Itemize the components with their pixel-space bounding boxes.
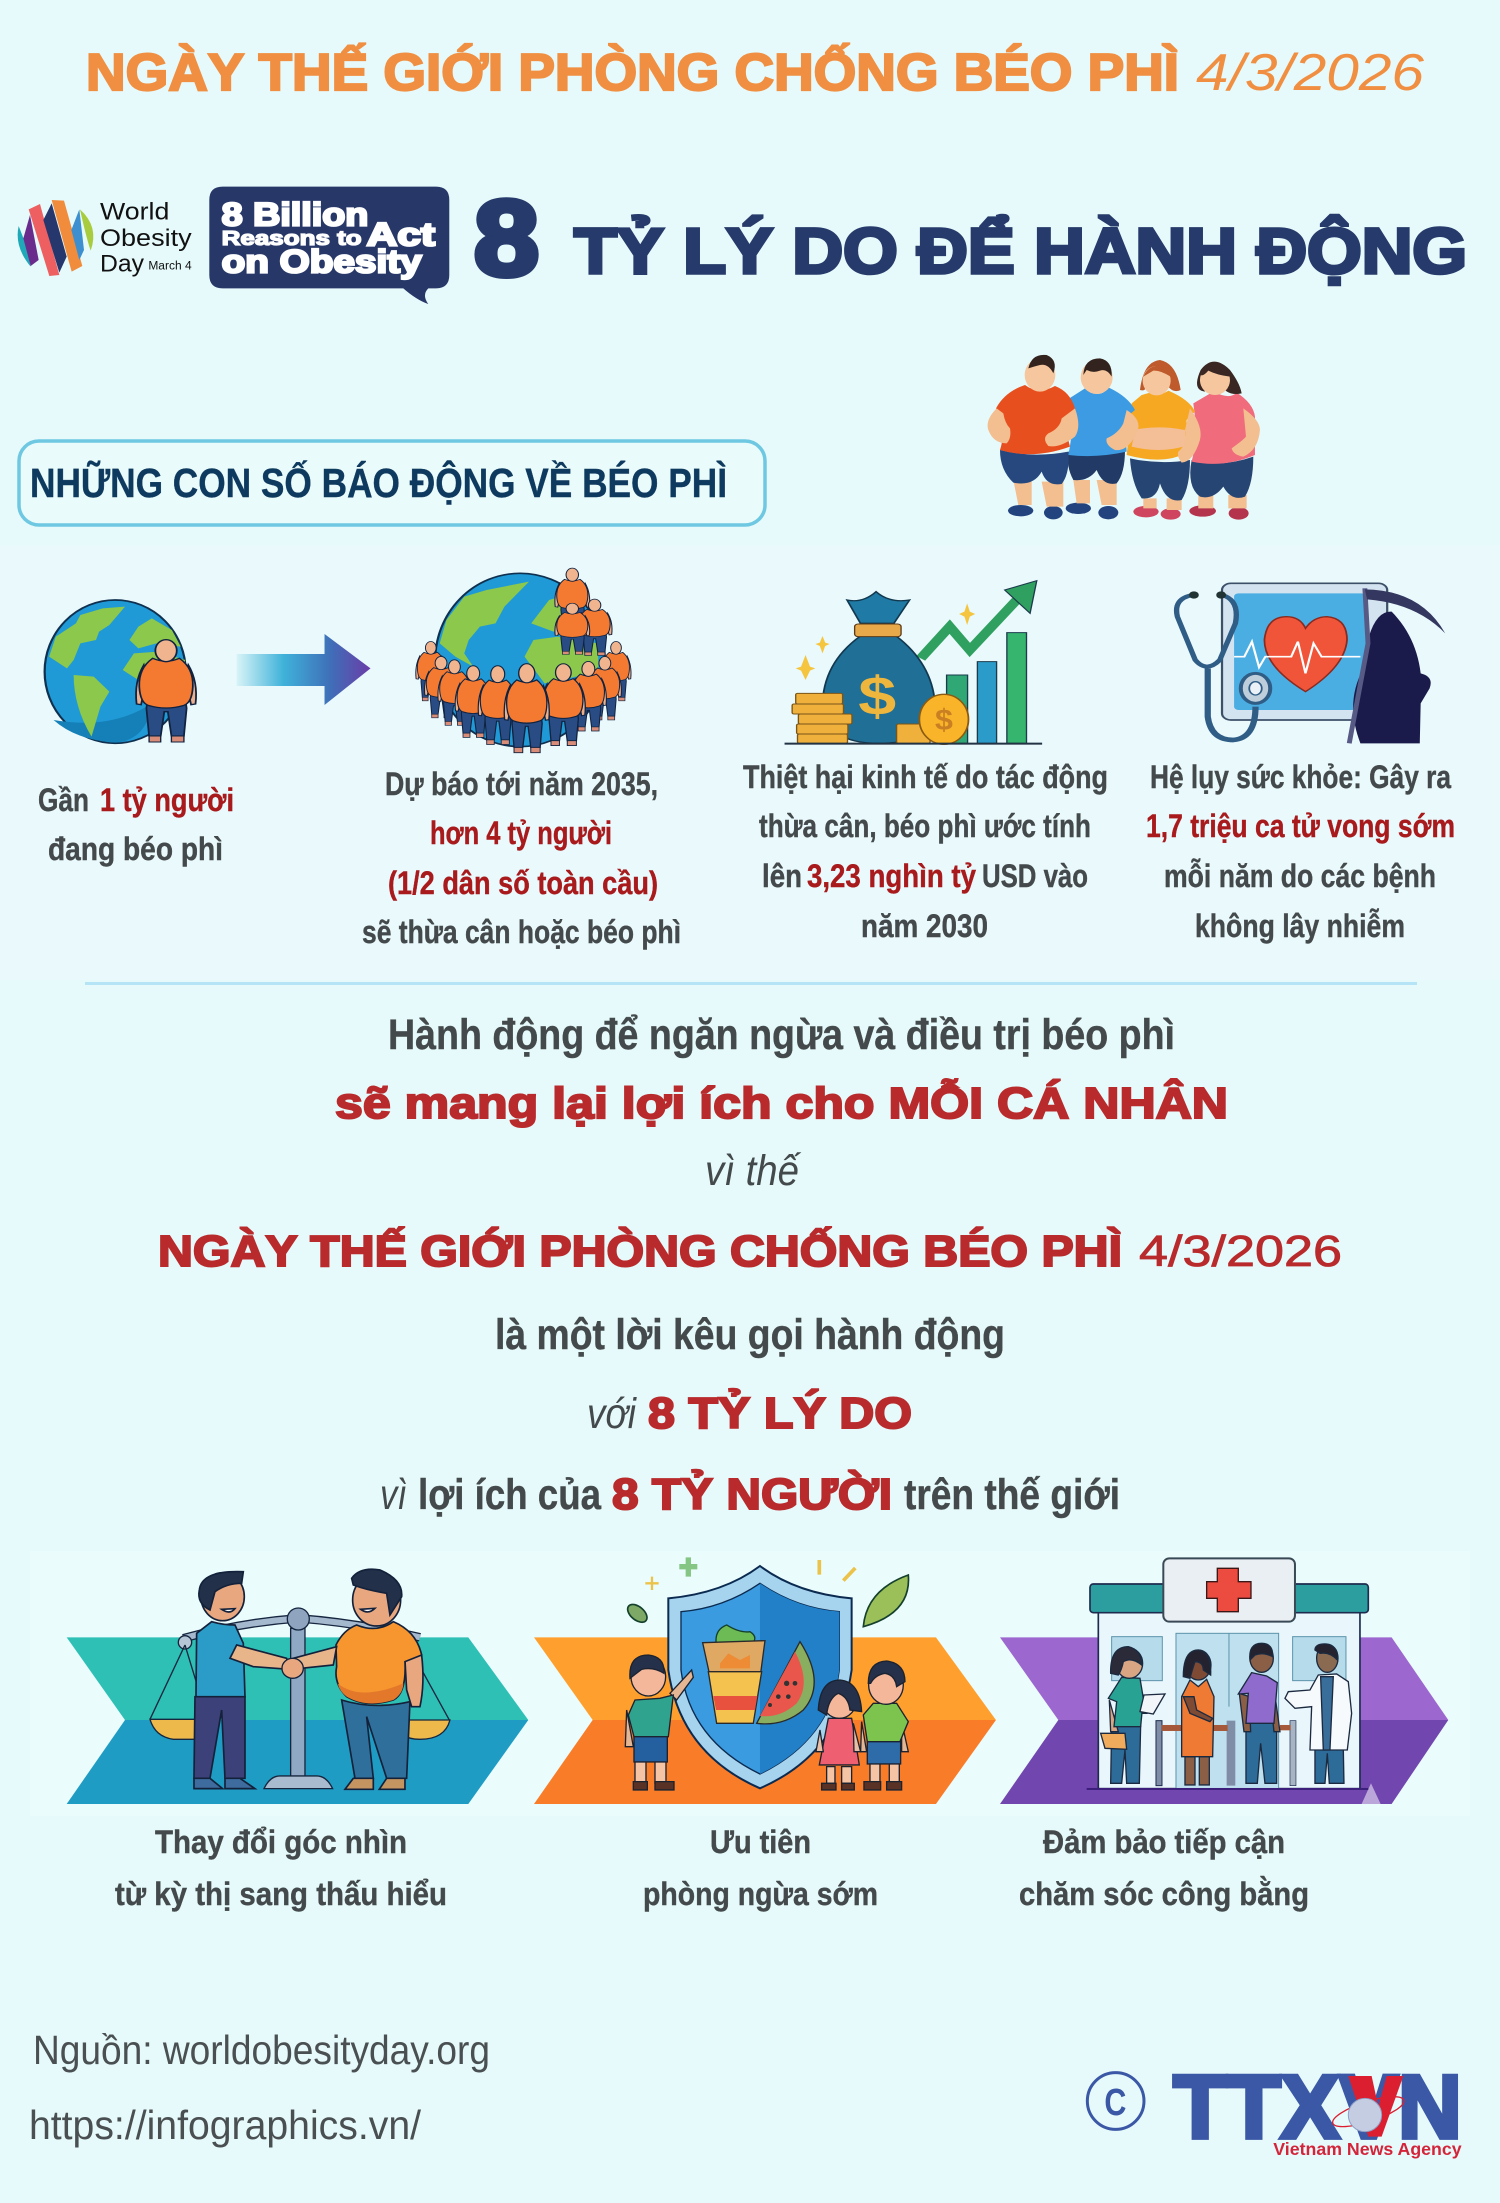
stat 3 text: năm 2030 [861,908,988,944]
caption 3: Đảm bảo tiếp cận [1043,1824,1285,1860]
woman with folder [1101,1647,1165,1783]
stat 1 text [38,782,234,867]
icon: globe with one overweight person [45,600,196,743]
stat 4 text: mỗi năm do các bệnh [1164,858,1436,894]
source text [29,2027,490,2148]
person in blue shirt [1066,358,1139,519]
call to action text block: vì thế [705,1147,802,1195]
boy waving [625,1655,693,1790]
speech bubble: 8 Billion Reasons to Act on Obesity: Reasons to [222,228,362,250]
stat 3 text: USD vào [982,858,1088,894]
speech bubble: 8 Billion Reasons to Act on Obesity: 8 Billion [222,196,368,233]
logo: World Obesity Day: March 4 [148,258,192,272]
caption 3: chăm sóc công bằng [1019,1876,1309,1912]
arrow [237,634,371,705]
caption 1 [115,1824,447,1912]
panel: equitable care, hospital [1000,1558,1448,1804]
stat 3 text [743,759,1108,944]
call to action text block: Hành động để ngăn ngừa và điều trị béo phì [388,1011,1175,1059]
woman in orange dress [1182,1650,1214,1785]
logo: World Obesity Day: Obesity [100,225,192,252]
teal chevron [67,1637,528,1804]
person in yellow shirt [1127,360,1201,520]
caption 1: từ kỳ thị sang thấu hiểu [115,1876,447,1912]
logo: World Obesity Day [18,198,192,278]
call to action text block: NGÀY THẾ GIỚI PHÒNG CHỐNG BÉO PHÌ [158,1225,1122,1276]
title: NGÀY THẾ GIỚI PHÒNG CHỐNG BÉO PHÌ [86,43,1179,102]
call to action text block: với [587,1390,637,1438]
hospital building [1087,1558,1368,1790]
stat 1 text: Gần [38,782,89,818]
caption 3 [1019,1824,1309,1912]
illustration: four overweight people [988,355,1260,520]
caption 2: Ưu tiên [710,1824,811,1860]
balance scale [150,1608,450,1789]
caption 2: phòng ngừa sớm [643,1876,878,1912]
copyright mark [1087,2073,1144,2129]
queue barrier [1156,1721,1296,1786]
boy in green shirt [861,1661,908,1790]
stat 3 text: thừa cân, béo phì ước tính [759,808,1091,844]
stat 4 text: không lây nhiễm [1195,908,1405,944]
heading: 8 tỷ lý do để hành động: TỶ LÝ DO ĐỂ HÀNH ĐỘNG [574,214,1467,287]
panel: early prevention, shield with children [534,1557,996,1804]
call to action text block: vì [380,1471,407,1519]
doctor [1285,1644,1352,1783]
stat 1 text: 1 tỷ người [100,782,234,818]
person in red shirt [988,355,1078,519]
speech bubble: 8 Billion Reasons to Act on Obesity [209,187,449,304]
orange chevron [534,1637,996,1804]
call to action text block: là một lời kêu gọi hành động [495,1311,1005,1359]
man in purple shirt [1238,1643,1280,1783]
icon: globe surrounded by crowd [416,568,631,753]
handshake [282,1658,303,1678]
stat 3 text: 3,23 nghìn tỷ [807,858,976,894]
source text: Nguồn: worldobesityday.org [33,2027,490,2073]
purple chevron [1000,1637,1448,1804]
logo: TTXVN Vietnam News Agency: TTXVN [1173,2057,1462,2157]
section heading box: NHỮNG CON SỐ BÁO ĐỘNG VỀ BÉO PHÌ [30,460,727,506]
girl in pink dress [816,1680,862,1790]
stat 2 text: (1/2 dân số toàn cầu) [388,865,658,901]
speech bubble: 8 Billion Reasons to Act on Obesity: on Obesity [222,243,422,280]
stat 4 text [1146,759,1455,944]
copyright mark: C [1104,2081,1126,2124]
icon: money bag and growth chart [785,581,1042,745]
stat 2 text: Dự báo tới năm 2035, [385,766,658,802]
shield with food [668,1566,852,1788]
speech bubble: 8 Billion Reasons to Act on Obesity: Act [367,216,435,253]
red V with globe [1330,2076,1407,2137]
man in orange shirt [292,1569,423,1789]
source text: https://infographics.vn/ [29,2102,422,2148]
panel: changing perspective, handshake over scale [67,1569,528,1804]
man in blue shirt [194,1572,289,1789]
stat 2 text: sẽ thừa cân hoặc béo phì [362,914,681,950]
stat 2 text: hơn 4 tỷ người [430,815,612,851]
call to action text block: 4/3/2026 [1139,1227,1342,1276]
stat 3 text: Thiệt hại kinh tế do tác động [743,759,1108,795]
decorative leaves and sparkles [624,1557,909,1627]
section heading box [19,441,765,525]
logo: World Obesity Day: World [100,198,169,225]
call to action text block: trên thế giới [904,1471,1120,1519]
heading: 8 tỷ lý do để hành động: 8 [474,178,539,298]
logo: World Obesity Day: Day [100,251,144,278]
call to action text block: 8 TỶ LÝ DO [648,1388,912,1438]
caption 1: Thay đổi góc nhìn [155,1824,407,1860]
title: 4/3/2026 [1196,44,1424,102]
stat 1 text: đang béo phì [48,831,223,867]
person in pink shirt [1189,362,1260,520]
stat 2 text [362,766,681,950]
icon: health monitor, stethoscope and reaper [1177,583,1445,743]
call to action text block: sẽ mang lại lợi ích cho MỖI CÁ NHÂN [335,1077,1228,1128]
heading: 8 tỷ lý do để hành động [474,178,1467,298]
icon: money bag and growth chart: $ [935,703,953,737]
stat 3 text: lên [762,858,802,894]
icon: money bag and growth chart: $ [858,665,896,727]
call to action text block [158,1011,1342,1519]
call to action text block: lợi ích của [418,1471,602,1519]
logo: TTXVN Vietnam News Agency: Vietnam News Agency [1273,2139,1462,2159]
caption 2 [643,1824,878,1912]
call to action text block: 8 TỶ NGƯỜI [612,1469,892,1519]
